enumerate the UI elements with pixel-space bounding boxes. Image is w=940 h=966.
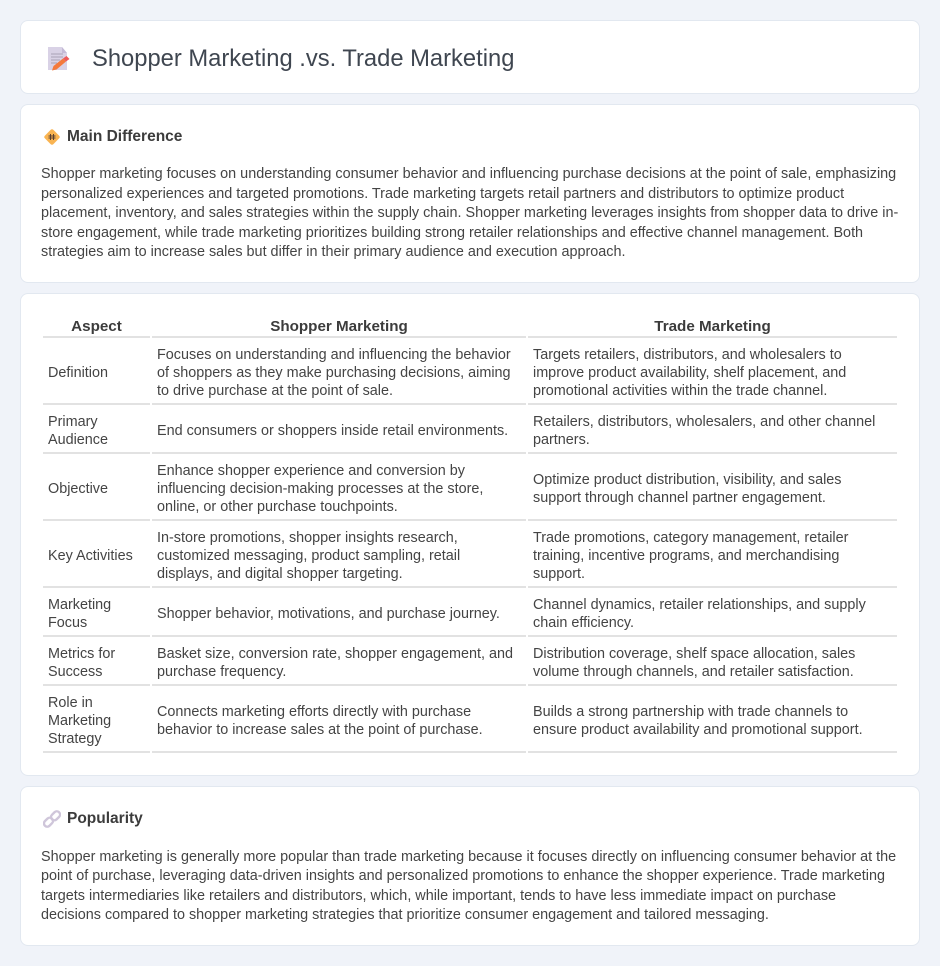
- comparison table: customized messaging, product sampling, retail: [157, 548, 460, 564]
- comparison table: online, or other purchase touchpoints.: [157, 499, 398, 515]
- table header: trade marketing: Trade Marketing: [654, 318, 771, 335]
- comparison table: Focuses on understanding and influencing the behavior: [157, 347, 511, 363]
- comparison table: improve product availability, shelf placement, and: [533, 365, 846, 381]
- panel: popularity: [20, 786, 920, 946]
- header card: [20, 20, 920, 94]
- comparison table: behavior to increase sales at the point of purchase.: [157, 722, 483, 738]
- icon: orange diamond: [44, 129, 60, 145]
- comparison table: promotional activities within the trade channel.: [533, 383, 827, 399]
- comparison table: partners.: [533, 432, 590, 448]
- comparison table: of shoppers as they make purchasing decisions, aiming: [157, 365, 511, 381]
- text: main difference: placement, inventory, and sales strategies within the supply chain. Shopper marketing leverages insights from shopper data to drive in-: [41, 205, 898, 221]
- comparison table: Success: [48, 664, 102, 680]
- comparison table: training, incentive programs, and merchandising: [533, 548, 839, 564]
- comparison table: Trade promotions, category management, retailer: [533, 530, 848, 546]
- text: main difference: strategies aim to increase sales but differ in their primary audience and execution approach.: [41, 244, 625, 260]
- heading: popularity: Popularity: [67, 810, 143, 827]
- text: main difference: personalized experiences and targeted promotions. Trade marketing targets retail partners and distributors to optimize product: [41, 186, 844, 202]
- comparison table: Channel dynamics, retailer relationships, and supply: [533, 597, 866, 613]
- comparison table: influencing decision-making processes at the store,: [157, 481, 483, 497]
- comparison table: volume through channels, and retailer satisfaction.: [533, 664, 854, 680]
- panel: main difference: [20, 104, 920, 283]
- text: popularity: decisions compared to shopper marketing strategies that prioritize consumer engagement and tailored messaging.: [41, 907, 769, 923]
- comparison table: Marketing: [48, 713, 111, 729]
- comparison table: In-store promotions, shopper insights research,: [157, 530, 458, 546]
- text: popularity: point of purchase, leveraging data-driven insights and personalized promotions to enhance the shopper experience. Trade marketing: [41, 868, 885, 884]
- comparison table: Focus: [48, 615, 87, 631]
- comparison table: Audience: [48, 432, 108, 448]
- comparison table: Definition: [48, 365, 108, 381]
- comparison table: chain efficiency.: [533, 615, 634, 631]
- text: main difference: Shopper marketing focuses on understanding consumer behavior and influencing purchase decisions at the point of sale, emphasizing: [41, 166, 896, 182]
- comparison table: Primary: [48, 414, 98, 430]
- comparison table: Marketing: [48, 597, 111, 613]
- icon: document with pencil: [48, 47, 70, 70]
- panel: comparison table: [20, 293, 920, 776]
- comparison table: Shopper behavior, motivations, and purchase journey.: [157, 606, 500, 622]
- comparison table: Strategy: [48, 731, 102, 747]
- title: Shopper Marketing .vs. Trade Marketing: [92, 45, 514, 72]
- text: popularity: Shopper marketing is generally more popular than trade marketing because it focuses directly on influencing consumer behavior at the: [41, 849, 896, 865]
- comparison table: Enhance shopper experience and conversion by: [157, 463, 465, 479]
- heading: main difference: Main Difference: [67, 128, 182, 145]
- comparison table: Targets retailers, distributors, and wholesalers to: [533, 347, 842, 363]
- text: popularity: targets intermediaries like retailers and distributors, which, while important, tends to have less immediate impact on purchase: [41, 888, 836, 904]
- comparison table: Distribution coverage, shelf space allocation, sales: [533, 646, 855, 662]
- table header: shopper marketing: Shopper Marketing: [270, 318, 408, 335]
- icon: link: [43, 810, 61, 828]
- comparison table: Role in: [48, 695, 93, 711]
- comparison table: Optimize product distribution, visibility, and sales: [533, 472, 841, 488]
- comparison table: End consumers or shoppers inside retail environments.: [157, 423, 508, 439]
- comparison table: Key Activities: [48, 548, 133, 564]
- comparison table: Retailers, distributors, wholesalers, and other channel: [533, 414, 875, 430]
- comparison table: Objective: [48, 481, 108, 497]
- comparison table: ensure product availability and promotional support.: [533, 722, 863, 738]
- comparison table: Metrics for: [48, 646, 115, 662]
- comparison table: support.: [533, 566, 585, 582]
- comparison table: displays, and digital shopper targeting.: [157, 566, 403, 582]
- table header: aspect: Aspect: [71, 318, 122, 335]
- comparison table: to drive purchase at the point of sale.: [157, 383, 393, 399]
- comparison table: support through channel partner engagement.: [533, 490, 826, 506]
- comparison table: Basket size, conversion rate, shopper engagement, and: [157, 646, 513, 662]
- comparison table: Connects marketing efforts directly with purchase: [157, 704, 471, 720]
- comparison table: Builds a strong partnership with trade channels to: [533, 704, 848, 720]
- text: main difference: store engagement, while trade marketing prioritizes building strong retailer relationships and effective channel management. Both: [41, 225, 863, 241]
- comparison table: purchase frequency.: [157, 664, 286, 680]
